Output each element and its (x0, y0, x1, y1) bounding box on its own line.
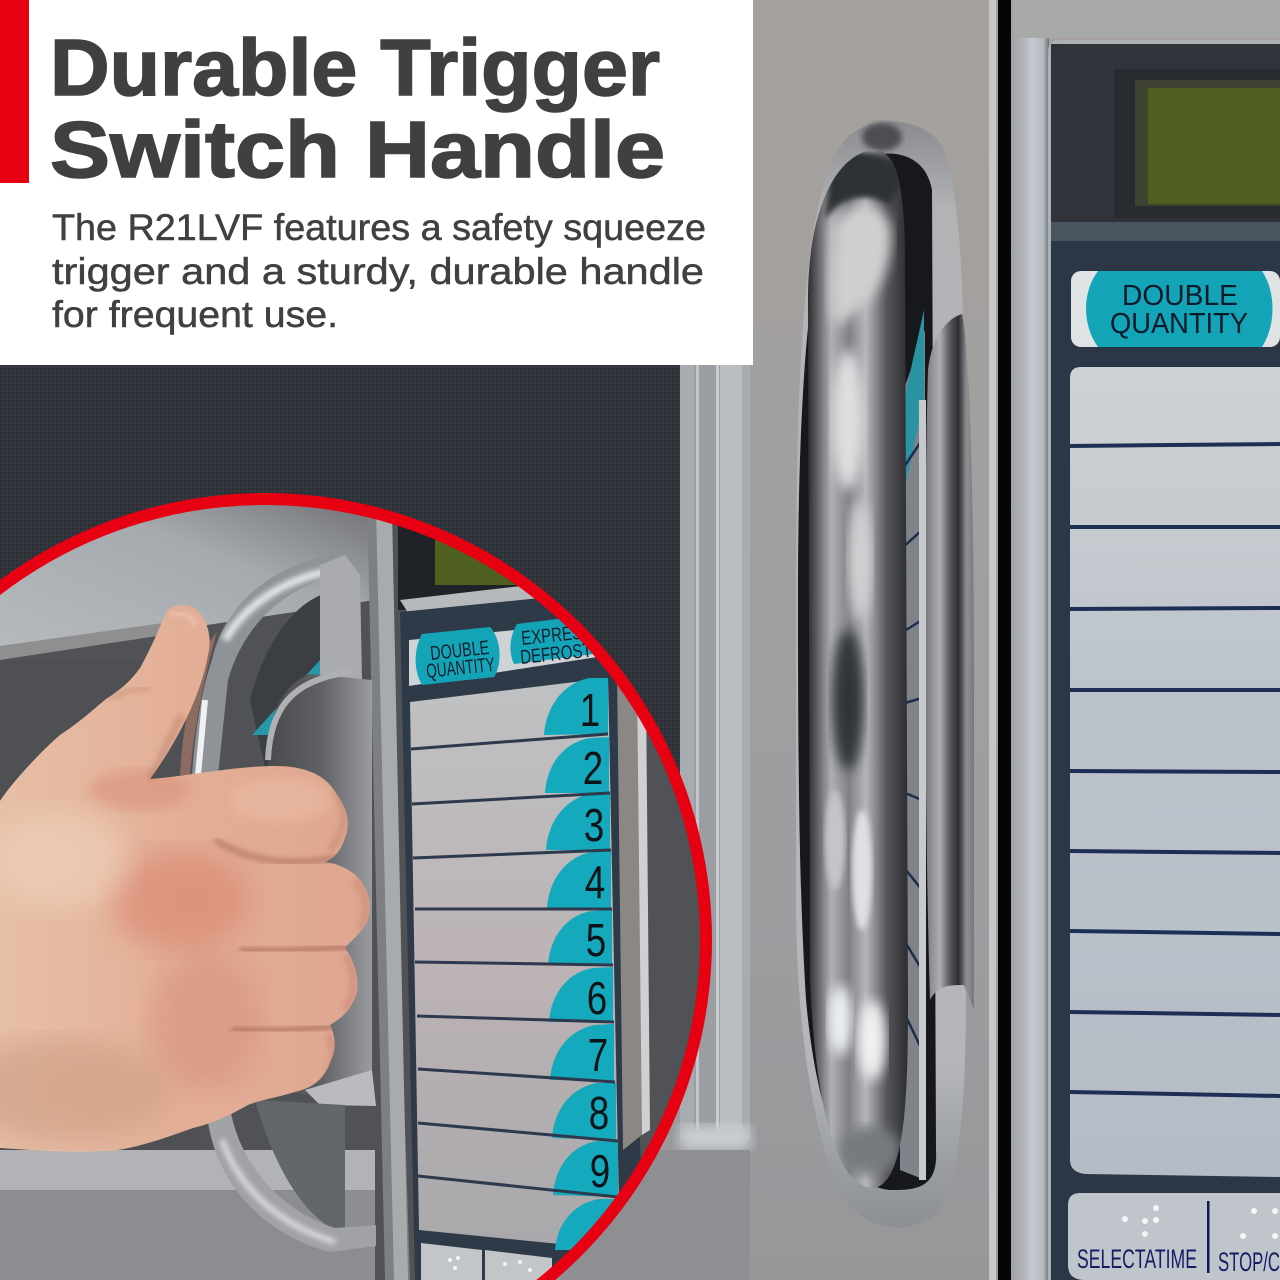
description: for frequent use. (52, 294, 338, 335)
door handle (796, 121, 974, 1228)
numbered keys 1 to 9: 5 (586, 914, 606, 966)
double quantity key (1071, 271, 1280, 347)
double quantity key: DOUBLE (1122, 280, 1238, 312)
chrome grip (805, 140, 910, 1200)
display window (1114, 69, 1280, 218)
description: The R21LVF features a safety squeeze (52, 207, 706, 248)
numbered keys 1 to 9 (410, 678, 620, 1250)
numbered keys 1 to 9: 3 (584, 799, 604, 851)
description: trigger and a sturdy, durable handle (52, 251, 704, 292)
double quantity and express defrost keys: QUANTITY (425, 653, 496, 683)
inset handle (180, 553, 376, 1252)
numbered keys 1 to 9: 2 (583, 742, 603, 794)
numbered keys 1 to 9: 9 (590, 1145, 610, 1197)
title (50, 23, 665, 194)
teal panel reflection (898, 310, 925, 1180)
red accent bar (0, 0, 29, 183)
door gap (998, 0, 1011, 1280)
numbered keys 1 to 9: 1 (580, 684, 600, 736)
inset frame and dark panel (367, 500, 658, 1280)
squeeze trigger lever (925, 314, 974, 1010)
dark mesh panel (0, 360, 680, 820)
title: Switch Handle (50, 105, 665, 194)
numbered keys 1 to 9: 6 (587, 972, 607, 1024)
brushed frame strip (1011, 0, 1049, 1280)
numbered keys 1 to 9: 7 (588, 1029, 608, 1081)
recess (798, 154, 936, 1190)
handle flange (796, 121, 966, 1228)
double quantity key: QUANTITY (1110, 308, 1248, 340)
double quantity and express defrost keys: EXPRESS (520, 620, 593, 650)
inset circle: hand squeezing the trigger (0, 490, 750, 1280)
bottom keys (1068, 1193, 1280, 1280)
numbered keys 1 to 9: 8 (589, 1087, 609, 1139)
number key rows (1070, 367, 1280, 1177)
inset door surface (0, 490, 750, 1280)
red circle outline (0, 493, 712, 1280)
hand (0, 605, 370, 1152)
numbered keys 1 to 9: 4 (585, 856, 605, 908)
double quantity and express defrost keys: DOUBLE (429, 636, 490, 665)
double quantity and express defrost keys: DEFROST (519, 638, 593, 669)
double quantity and express defrost keys (409, 618, 596, 686)
title: Durable Trigger (50, 23, 660, 112)
inset bottom keys (421, 1243, 552, 1280)
control panel (1015, 0, 1280, 1280)
text panel (0, 0, 753, 365)
description (52, 207, 706, 335)
bottom keys: SELECTATIME (1077, 1244, 1197, 1274)
